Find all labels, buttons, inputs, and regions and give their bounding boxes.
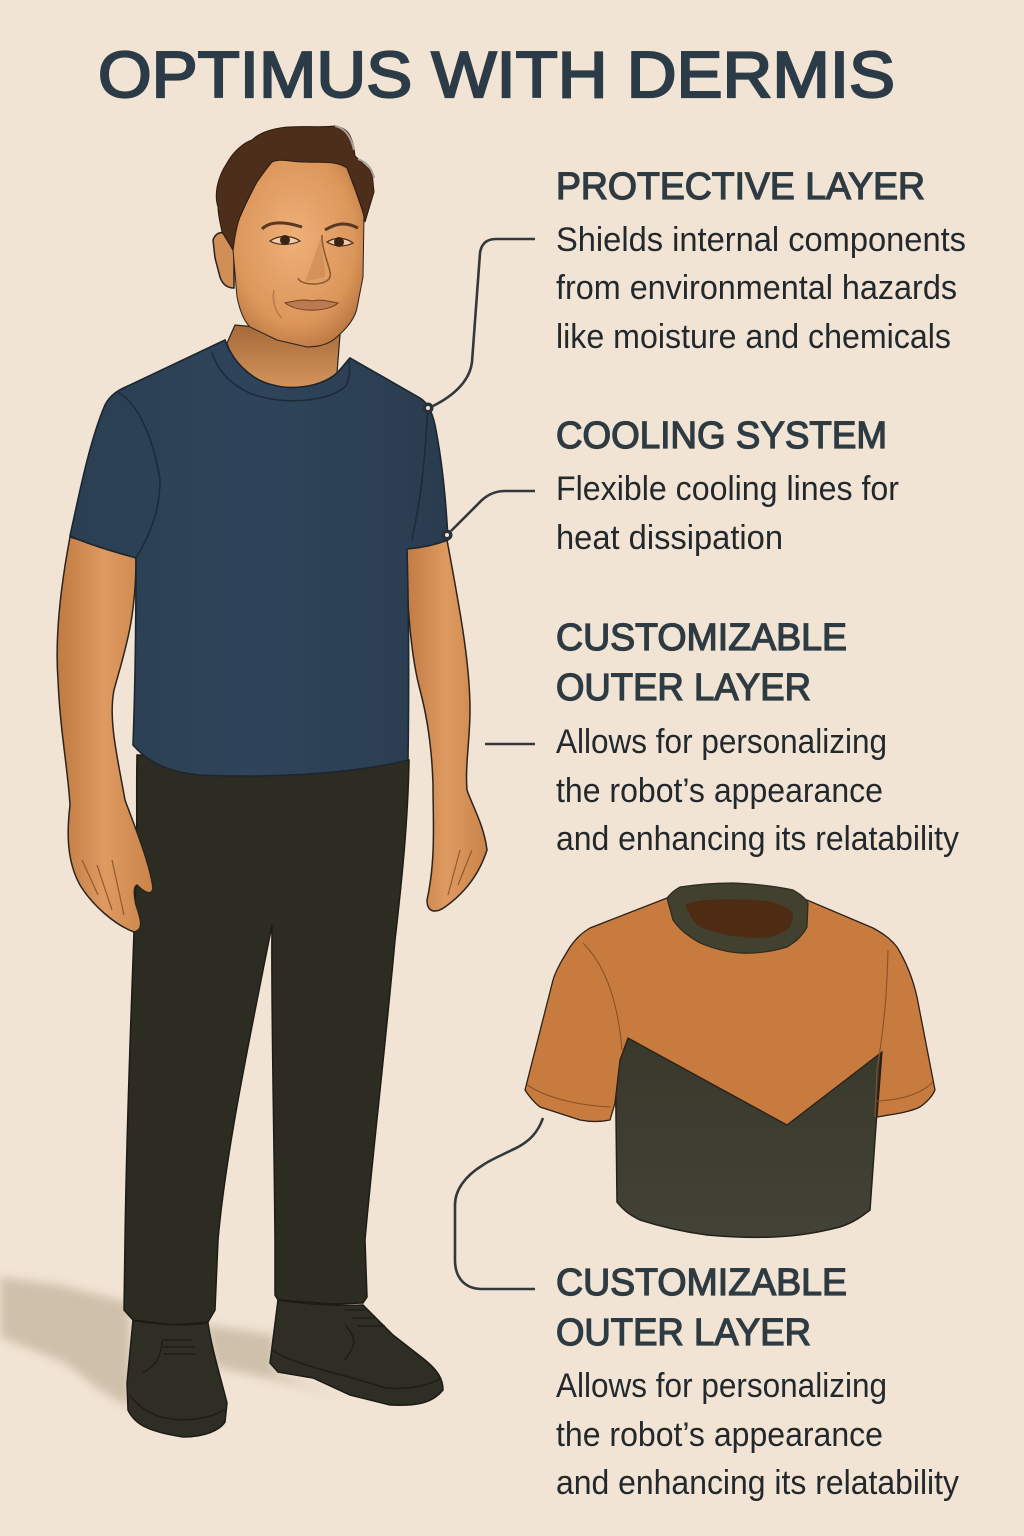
text block: cooling system: COOLING SYSTEM (556, 415, 887, 457)
left arm and hand (57, 537, 153, 932)
text block: customizable outer layer (shirt): OUTER LAYER (556, 1312, 811, 1354)
text block: protective layer (556, 166, 966, 356)
t-shirt (70, 340, 448, 776)
text block: protective layer: from environmental hazards (556, 269, 957, 307)
text block: cooling system: heat dissipation (556, 519, 783, 557)
text block: customizable outer layer (shirt) (556, 1262, 959, 1502)
text block: protective layer: Shields internal components (556, 221, 966, 259)
face features (262, 223, 358, 318)
text block: customizable outer layer: and enhancing its relatability (556, 820, 959, 858)
text block: customizable outer layer (shirt): CUSTOMIZABLE (556, 1262, 847, 1304)
left shoe (127, 1320, 227, 1437)
callout line: cooling system (442, 491, 535, 540)
text block: customizable outer layer (shirt): Allows for personalizing (556, 1367, 887, 1405)
ear (213, 233, 234, 288)
text block: customizable outer layer: CUSTOMIZABLE (556, 617, 847, 659)
text block: protective layer: like moisture and chemicals (556, 318, 951, 356)
left hand fingers (82, 860, 124, 915)
title: OPTIMUS WITH DERMIS (98, 38, 895, 111)
shirt lower dark body (615, 1030, 882, 1237)
collar opening (685, 899, 793, 938)
callout line: customizable outer layer (485, 743, 535, 745)
text block: cooling system: Flexible cooling lines for (556, 470, 899, 508)
text block: customizable outer layer (shirt): and enhancing its relatability (556, 1464, 959, 1502)
right hand fingers (448, 850, 472, 895)
text block: customizable outer layer (shirt): the robot’s appearance (556, 1416, 883, 1454)
hair (216, 126, 374, 250)
callout line: shirt illustration (455, 1118, 543, 1289)
text block: customizable outer layer: the robot’s appearance (556, 772, 883, 810)
hair highlights (335, 126, 374, 178)
text block: customizable outer layer: OUTER LAYER (556, 667, 811, 709)
two-tone shirt illustration (525, 883, 935, 1237)
callout line: protective layer (422, 239, 535, 414)
collar seam (212, 352, 350, 401)
right shoe (270, 1300, 443, 1405)
text block: cooling system (556, 415, 899, 557)
text block: customizable outer layer (556, 617, 959, 858)
collar (667, 883, 808, 953)
trousers (124, 755, 409, 1325)
figure: man in t-shirt and trousers (0, 126, 487, 1437)
face (233, 160, 364, 347)
right arm and hand (405, 540, 487, 911)
neck (227, 325, 340, 387)
text block: protective layer: PROTECTIVE LAYER (556, 166, 925, 208)
text block: customizable outer layer: Allows for personalizing (556, 723, 887, 761)
shirt orange upper (525, 898, 935, 1125)
ground shadow (0, 1277, 345, 1408)
